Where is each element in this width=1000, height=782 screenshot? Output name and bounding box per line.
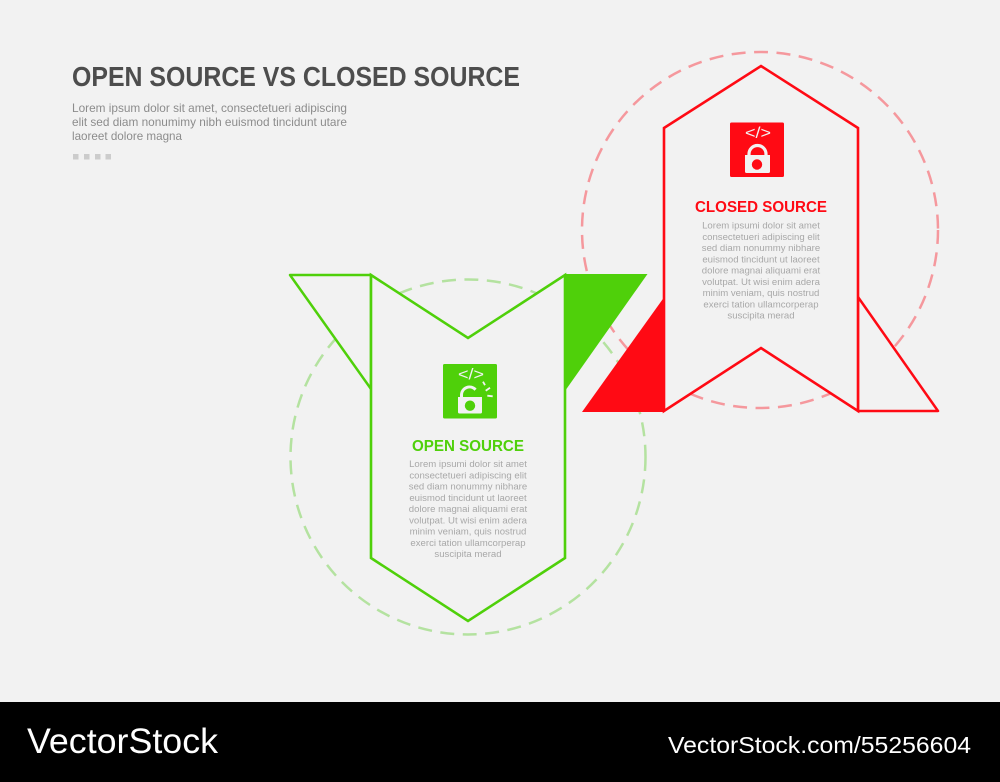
- open source body text: [409, 459, 528, 560]
- dashed circle: closed source: [582, 52, 938, 408]
- dashed circle: open source: [290, 280, 646, 634]
- pagination squares: [73, 154, 111, 160]
- closed source heading: CLOSED SOURCE: [695, 199, 827, 216]
- open source body text: exerci tation ullamcorperap: [410, 538, 526, 549]
- closed source body text: Lorem ipsumi dolor sit amet: [702, 220, 820, 232]
- intro text: [72, 101, 347, 143]
- closed source body text: sed diam nonummy nibhare: [702, 243, 820, 254]
- footer bar: [0, 702, 1000, 782]
- closed source body text: volutpat. Ut wisi enim adera: [702, 277, 821, 288]
- closed source banner outline: [664, 66, 858, 411]
- open source body text: dolore magnai aliquami erat: [409, 504, 528, 515]
- open source body text: euismod tincidunt ut laoreet: [409, 493, 527, 504]
- closed source body text: exerci tation ullamcorperap: [703, 299, 819, 310]
- open source body text: volutpat. Ut wisi enim adera: [409, 515, 528, 526]
- open source body text: Lorem ipsumi dolor sit amet: [409, 459, 527, 470]
- icon: closed padlock with code tag: </>: [745, 125, 771, 142]
- open source heading: OPEN SOURCE: [412, 438, 524, 455]
- panel: closed source: [582, 66, 938, 412]
- panel: open source: [290, 274, 648, 621]
- intro text: elit sed diam nonumimy nibh euismod tincidunt utare: [72, 115, 347, 129]
- intro text: laoreet dolore magna: [72, 129, 182, 143]
- intro text: Lorem ipsum dolor sit amet, consectetueri adipiscing: [72, 101, 347, 115]
- open source body text: consectetueri adipiscing elit: [409, 470, 527, 481]
- closed source body text: suscipita merad: [727, 310, 795, 322]
- icon: closed padlock with code tag: [730, 122, 784, 177]
- open source body text: minim veniam, quis nostrud: [410, 526, 526, 538]
- open source banner outline: [371, 275, 565, 621]
- open source left flap: [290, 275, 371, 389]
- closed source body text: [702, 220, 821, 322]
- closed source left fold: [582, 296, 665, 412]
- closed source body text: euismod tincidunt ut laoreet: [702, 254, 820, 265]
- open source body text: suscipita merad: [434, 549, 502, 560]
- footer url: VectorStock.com/55256604: [668, 732, 971, 758]
- icon: open padlock with code tag: [443, 364, 497, 418]
- closed source body text: minim veniam, quis nostrud: [703, 288, 819, 299]
- title: OPEN SOURCE VS CLOSED SOURCE: [72, 61, 520, 92]
- closed source body text: dolore magnai aliquami erat: [702, 266, 821, 276]
- closed source right flap: [858, 297, 938, 411]
- open source body text: sed diam nonummy nibhare: [409, 482, 527, 492]
- open source right fold: [564, 274, 648, 391]
- icon: open padlock with code tag: </>: [458, 366, 484, 384]
- closed source body text: consectetueri adipiscing elit: [702, 232, 820, 243]
- footer brand: VectorStock: [27, 722, 219, 761]
